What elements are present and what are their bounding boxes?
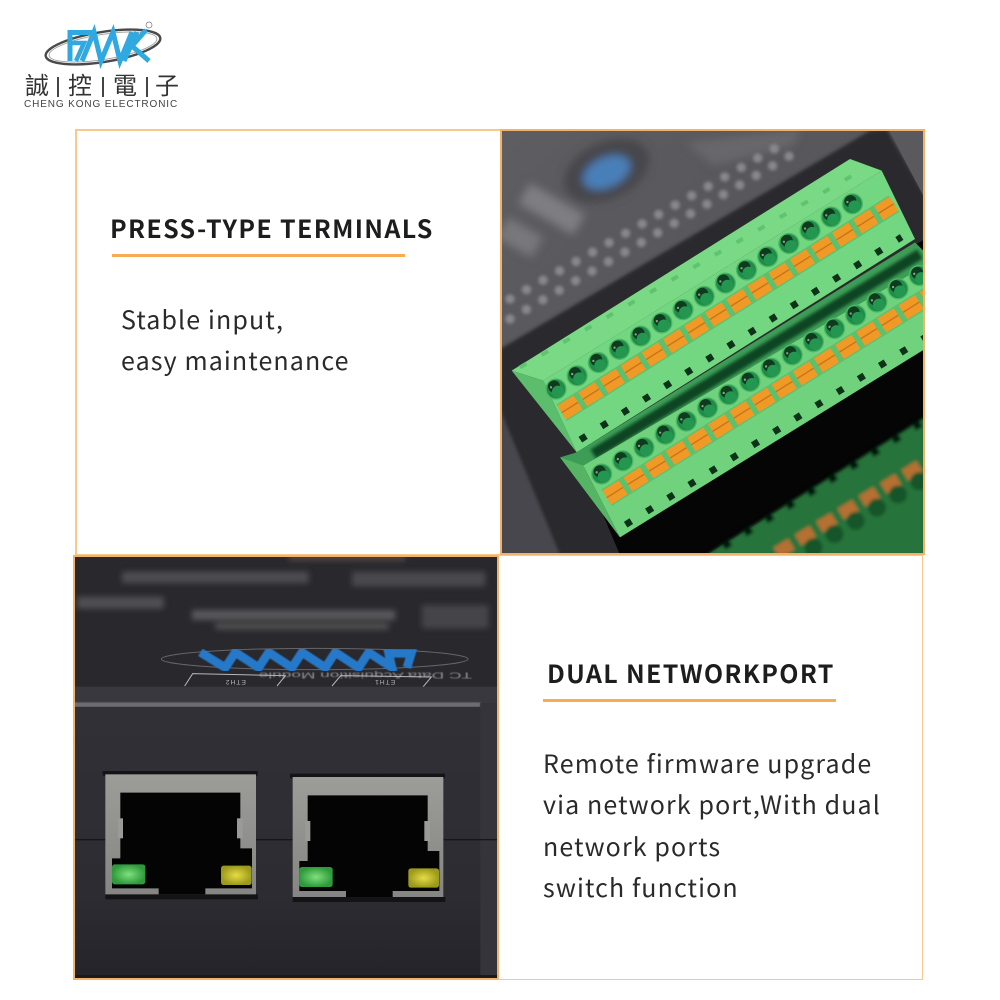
wire holes [602,266,935,474]
blurred status LEDs [497,126,800,257]
blurred device labels [77,555,489,629]
ETH port labels: ETH2 [225,678,246,685]
shadow gap between terminal blocks [560,242,925,469]
logo English name: CHENG KONG ELECTRONIC [24,99,178,110]
text block: network port description: via network port,With dual [543,786,881,822]
text block: terminals description [121,301,350,378]
green LED [112,864,145,884]
device body [500,129,925,555]
logo [24,22,179,110]
panel: press-type terminals text [75,129,500,556]
orange push buttons [607,293,933,498]
blurred module number [184,630,462,654]
logo mark: ellipse and blue zigzag [44,22,162,69]
text block: network port description: network ports [543,828,721,864]
orange push buttons [562,204,894,413]
text block: network port description: switch function [543,869,739,905]
upside-down device logo [161,648,468,670]
yellow LED [221,866,252,885]
panel: terminal block photo [500,129,925,555]
square holes [580,237,902,440]
photo border [74,556,498,979]
LED rows [510,147,790,319]
panel: network ports photo [73,555,499,980]
logo Chinese name [25,73,179,100]
square holes [626,332,933,525]
ETH port labels [185,674,431,687]
terminal block: lower [560,263,937,537]
green LED [299,867,333,887]
logo Chinese name: 子 [155,73,179,100]
RJ45 port left [103,771,258,899]
panel: dual network port text [498,555,923,980]
text block: network port description: Remote firmware upgrade [543,745,872,781]
text block: terminals description: easy maintenance [121,342,350,378]
device front face [72,687,500,980]
yellow LED [408,868,439,888]
RJ45 port right [290,774,445,902]
heading: dual network port: DUAL NETWORKPORT [547,655,835,691]
text block: terminals description: Stable input, [121,301,284,337]
logo Chinese name: 誠 [25,73,49,100]
photo border [501,130,924,554]
logo Chinese name: 控 [68,73,92,100]
terminal block: upper [512,159,915,452]
heading underline [112,254,405,257]
upside-down module caption: TC Data Acquisition Module [258,670,472,680]
text block: network port description [543,745,881,905]
heading underline [543,699,836,702]
ETH port labels: ETH1 [374,678,395,685]
terminal block: out-of-focus third row [707,417,925,555]
logo Chinese name: 電 [113,73,137,100]
heading: press-type terminals: PRESS-TYPE TERMINALS [110,210,434,246]
wire holes [556,191,873,389]
